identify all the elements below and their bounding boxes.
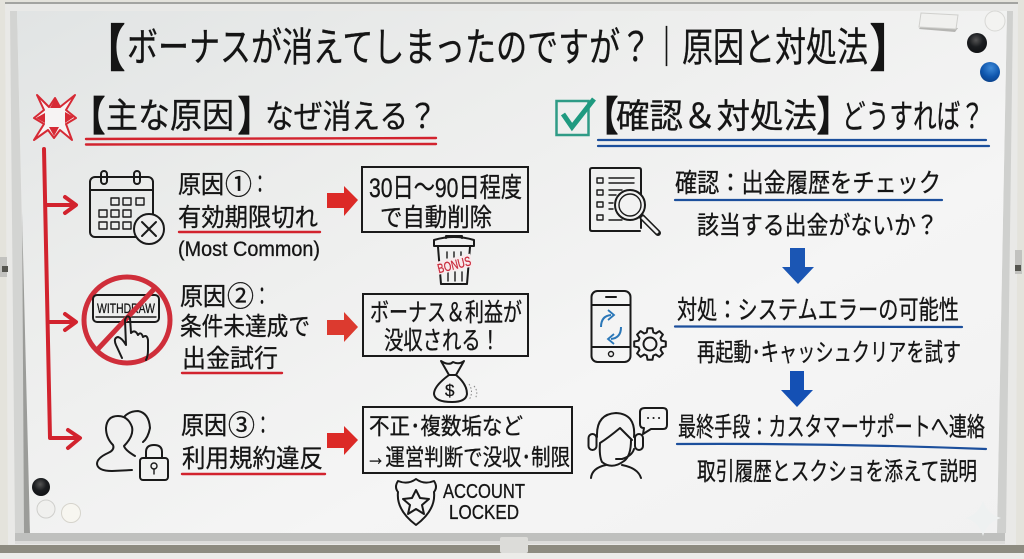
title bbox=[85, 21, 910, 77]
box 2: ボーナス＆利益が bbox=[370, 299, 522, 327]
arrow: step 1 to 2 bbox=[782, 248, 814, 284]
solutions heading: 【 bbox=[586, 95, 618, 139]
account locked label: LOCKED bbox=[449, 502, 519, 524]
account locked label bbox=[443, 481, 525, 524]
icon: bonus trash can: BONUS bbox=[436, 253, 473, 276]
icon: calendar with x bbox=[90, 171, 164, 244]
icon: users with lock bbox=[97, 411, 168, 480]
cause 1 text: (Most Common) bbox=[178, 238, 320, 261]
cause 3 text: 利用規約違反 bbox=[182, 445, 323, 473]
step 1 text bbox=[675, 168, 942, 240]
cause 3 text bbox=[181, 410, 325, 474]
cause 2 text: 原因 bbox=[180, 283, 226, 311]
icon: police shield bbox=[396, 479, 436, 525]
cause 2 text: 条件未達成で bbox=[180, 313, 310, 341]
box 3: 不正･複数垢など bbox=[369, 413, 523, 439]
panel: causes bbox=[34, 95, 572, 525]
causes heading underline bbox=[86, 138, 436, 144]
cause 1 text: 有効期限切れ bbox=[178, 204, 318, 232]
box 3: →運営判断で没収･制限 bbox=[366, 444, 570, 470]
cause 3 text: ： bbox=[255, 412, 271, 440]
arrow to box 1 bbox=[327, 186, 358, 216]
icon: document with magnifier bbox=[590, 168, 658, 233]
title: 】 bbox=[870, 21, 910, 77]
cause 1 text bbox=[178, 169, 320, 261]
solutions heading underline bbox=[598, 140, 989, 146]
solutions heading bbox=[586, 95, 984, 139]
causes heading: なぜ消える？ bbox=[265, 98, 437, 135]
solutions heading: 】 bbox=[817, 95, 849, 139]
causes heading bbox=[73, 95, 437, 139]
icon: explosion bbox=[34, 95, 76, 140]
icon: money bag bbox=[434, 361, 477, 402]
icon: bonus trash can bbox=[434, 236, 474, 284]
arrow to box 3 bbox=[327, 426, 358, 455]
solutions heading: 確認＆対処法 bbox=[616, 98, 817, 136]
step 3 text bbox=[677, 412, 986, 486]
cause 3 text: ③ bbox=[228, 410, 255, 441]
icon: withdraw prohibited bbox=[84, 277, 170, 363]
step 1 text: 確認：出金履歴をチェック bbox=[675, 168, 941, 198]
cause 1 text: ① bbox=[225, 169, 252, 200]
cause 2 text bbox=[180, 281, 310, 373]
cause 1 text: ： bbox=[252, 171, 268, 199]
box 1: 30日～90日程度 bbox=[369, 173, 522, 203]
icon: phone with gear bbox=[592, 291, 666, 362]
flow line with branch arrows bbox=[44, 149, 80, 448]
causes heading: 主な原因 bbox=[106, 97, 234, 136]
box 3 bbox=[363, 407, 572, 473]
step 2 text bbox=[675, 295, 962, 367]
box 1: で自動削除 bbox=[380, 204, 492, 232]
icon: money bag: $ bbox=[445, 381, 455, 400]
cause 2 text: ② bbox=[227, 281, 254, 312]
step 1 text: 該当する出金がないか？ bbox=[697, 212, 938, 240]
box 1 bbox=[362, 167, 528, 232]
icon: support agent bbox=[588, 408, 667, 478]
causes heading: 【 bbox=[73, 95, 105, 139]
icon: withdraw prohibited: WITHDRAW bbox=[97, 300, 156, 316]
magnets: bottom left bbox=[32, 478, 80, 522]
box 2: 没収される！ bbox=[384, 327, 500, 355]
panel: solutions bbox=[556, 95, 989, 486]
cause 2 text: ： bbox=[254, 283, 270, 311]
cause 1 text: 原因 bbox=[178, 171, 224, 199]
box 2 bbox=[363, 294, 528, 356]
causes heading: 】 bbox=[238, 95, 270, 139]
title: 【 bbox=[85, 21, 125, 77]
magnets: top right bbox=[919, 11, 1005, 82]
arrow to box 2 bbox=[327, 312, 358, 342]
cause 3 text: 原因 bbox=[181, 412, 227, 440]
arrow: step 2 to 3 bbox=[781, 371, 813, 407]
icon: green checkbox bbox=[556, 99, 594, 135]
icon: sparkle watermark bbox=[966, 501, 1001, 536]
account locked label: ACCOUNT bbox=[443, 481, 525, 503]
cause 2 text: 出金試行 bbox=[182, 345, 278, 373]
